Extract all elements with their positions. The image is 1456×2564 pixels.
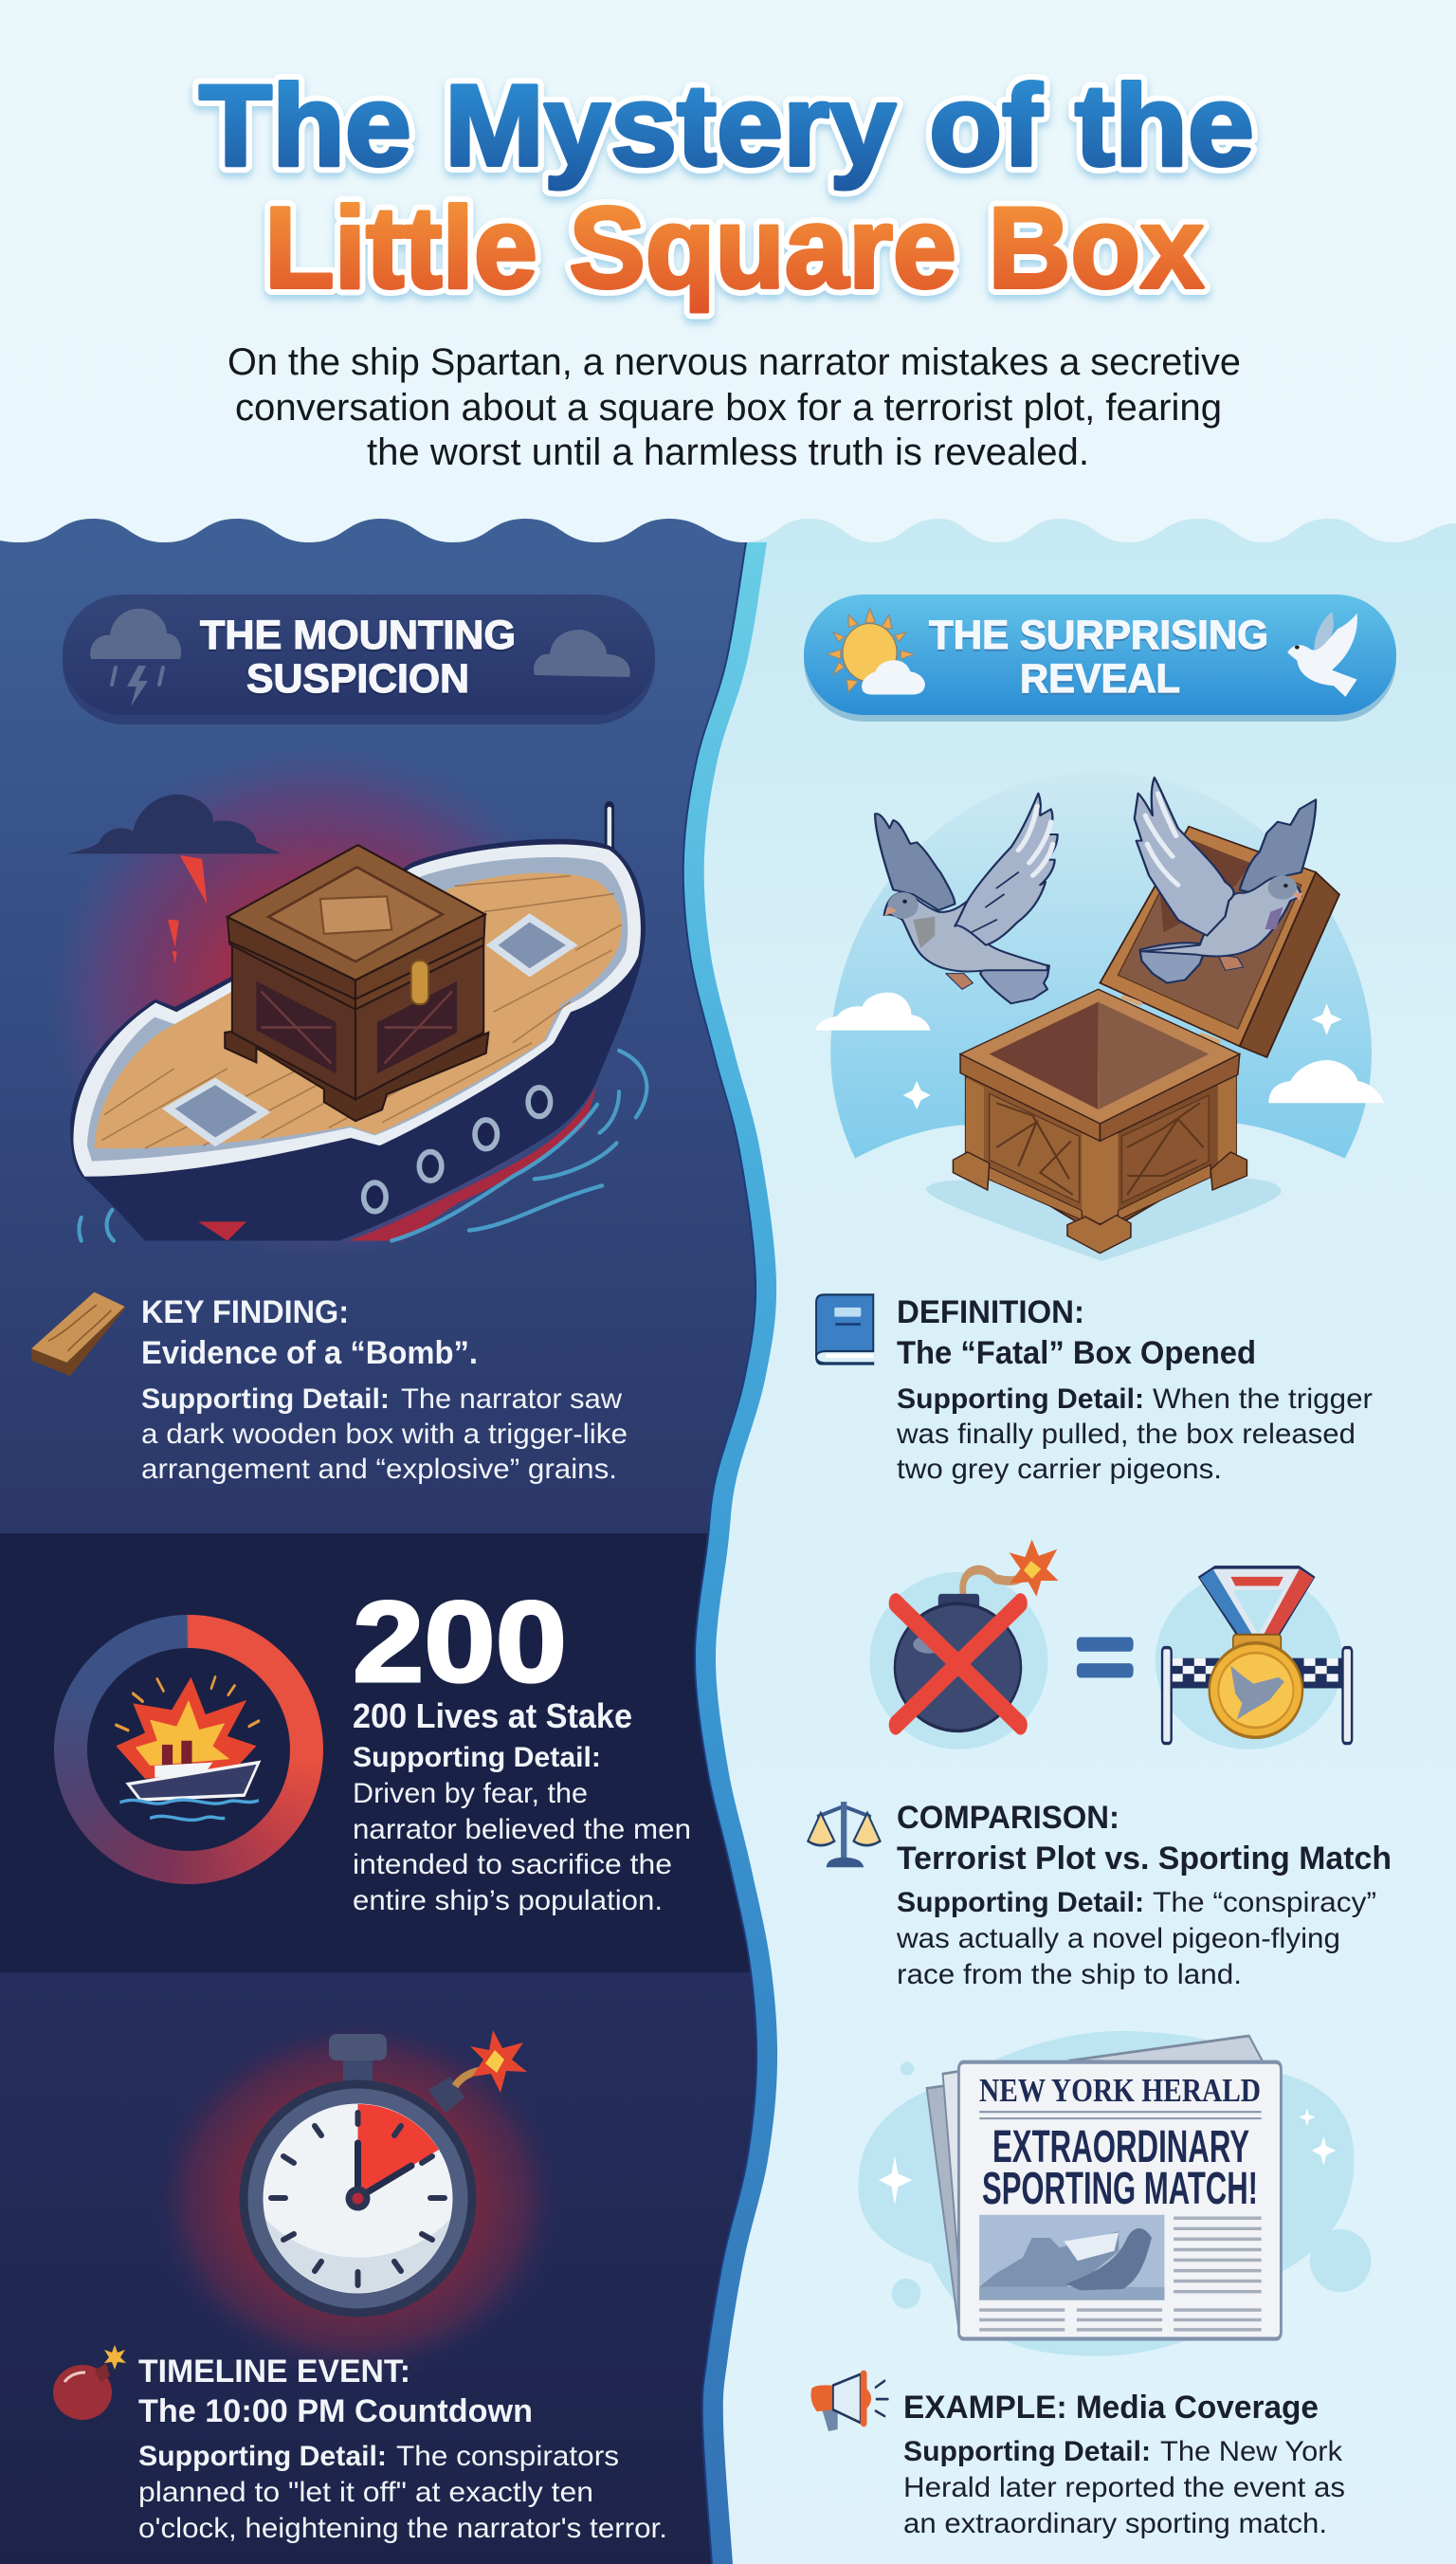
- illustration: ship with wooden box: [48, 744, 646, 1258]
- open lid: [1240, 872, 1339, 1057]
- title: Little Square Box: [264, 183, 1204, 312]
- heading text: REVEAL: [1020, 656, 1180, 702]
- column lines: [979, 2218, 1262, 2330]
- title: [199, 61, 1254, 312]
- back sheets: [927, 2083, 958, 2330]
- pigeon right: [1135, 778, 1316, 983]
- icon: megaphone: [810, 2371, 888, 2431]
- text block: timeline event: [138, 2353, 667, 2544]
- illustration: stopwatch bomb: [147, 2013, 568, 2383]
- stat: 200 lives at stake: Driven by fear, the: [353, 1778, 588, 1809]
- text block: key finding: Evidence of a “Bomb”.: [141, 1335, 478, 1371]
- text block: timeline event: o'clock, heightening the narrator's terror.: [138, 2513, 667, 2544]
- blob backdrop: [858, 2031, 1355, 2356]
- icon: storm cloud: [90, 609, 181, 706]
- storm cloud: [67, 795, 281, 853]
- text block: definition: The “Fatal” Box Opened: [897, 1335, 1256, 1371]
- heading text: THE SURPRISING: [929, 613, 1268, 658]
- text block: definition: [896, 1294, 1373, 1485]
- warning marks: [168, 855, 207, 963]
- icon: scales: [808, 1802, 881, 1867]
- stat: 200 lives at stake: Supporting Detail:: [353, 1742, 601, 1773]
- panel: right light reveal side: [664, 519, 1456, 2564]
- icon: book: [816, 1294, 873, 1364]
- deck planks: [101, 876, 622, 1148]
- title: Little Square Box: [264, 183, 1204, 312]
- chart: donut gauge with exploding ship: [54, 1615, 323, 1884]
- headline: EXTRAORDINARY: [992, 2122, 1249, 2172]
- text block: key finding: a dark wooden box with a trigger-like: [141, 1419, 628, 1450]
- icon: white dove: [1287, 612, 1357, 697]
- text block: key finding: KEY FINDING:: [141, 1294, 349, 1330]
- fuse and spark: [428, 2077, 464, 2113]
- text block: key finding: Supporting Detail:: [141, 1383, 390, 1415]
- mast: [600, 806, 619, 855]
- feet and base rail: [984, 1164, 1210, 1220]
- text block: key finding: The narrator saw: [401, 1383, 622, 1415]
- text block: comparison: Supporting Detail:: [897, 1887, 1144, 1918]
- box rim: [960, 1054, 1100, 1141]
- illustration: newspaper: [858, 2031, 1371, 2356]
- hinges: [1123, 998, 1218, 1041]
- portholes: [364, 1088, 551, 1212]
- text block: comparison: Terrorist Plot vs. Sporting Match: [897, 1841, 1392, 1877]
- text block: comparison: [896, 1800, 1392, 1990]
- pigeon left: [875, 794, 1058, 1003]
- divider: wavy blue band: [0, 542, 777, 2564]
- sky dome: [830, 771, 1372, 1159]
- front page: [958, 2062, 1281, 2339]
- heading text: SUSPICION: [246, 656, 469, 702]
- text block: comparison: race from the ship to land.: [897, 1959, 1242, 1990]
- intro text: [228, 341, 1241, 473]
- text block: timeline event: planned to "let it off" at exactly ten: [138, 2477, 593, 2508]
- icon: sun behind cloud: [828, 609, 925, 695]
- text block: comparison: The “conspiracy”: [1153, 1887, 1376, 1918]
- wooden box: [225, 845, 488, 1121]
- deck and rail: [73, 845, 641, 1177]
- icon: equals sign: [1077, 1638, 1134, 1677]
- heading pill: the mounting suspicion: [63, 595, 655, 724]
- stat: 200 lives at stake: [353, 1577, 691, 1916]
- text block: timeline event: Supporting Detail:: [138, 2441, 387, 2472]
- text block: definition: two grey carrier pigeons.: [897, 1454, 1222, 1485]
- icon: exploding ship: [116, 1677, 259, 1820]
- text block: example: EXAMPLE: Media Coverage: [903, 2390, 1319, 2426]
- stat: 200 lives at stake: entire ship’s population.: [353, 1885, 663, 1916]
- heading text: [200, 613, 516, 702]
- icon: wooden plank: [31, 1292, 126, 1376]
- text block: definition: When the trigger: [1153, 1383, 1373, 1415]
- text block: example: Supporting Detail:: [903, 2436, 1151, 2467]
- text block: example: an extraordinary sporting match.: [903, 2508, 1327, 2539]
- text block: example: Herald later reported the event as: [903, 2472, 1345, 2503]
- deck hatches: [162, 1078, 271, 1146]
- text block: definition: DEFINITION:: [897, 1294, 1084, 1330]
- text block: definition: was finally pulled, the box released: [896, 1419, 1356, 1450]
- text block: example: The New York: [1160, 2436, 1343, 2467]
- text block: comparison: COMPARISON:: [897, 1800, 1119, 1836]
- icon: crossed-out bomb: [869, 1539, 1059, 1749]
- intro text: the worst until a harmless truth is revealed.: [367, 431, 1089, 473]
- box shadow: [926, 1177, 1282, 1261]
- stat: 200 lives at stake: intended to sacrifice the: [353, 1849, 672, 1880]
- intro text: On the ship Spartan, a nervous narrator mistakes a secretive: [228, 341, 1241, 383]
- heading text: [929, 613, 1268, 702]
- text block: definition: Supporting Detail:: [897, 1383, 1144, 1415]
- stat: 200 lives at stake: narrator believed the men: [353, 1814, 691, 1845]
- text block: timeline event: The 10:00 PM Countdown: [138, 2393, 533, 2429]
- panel: left dark suspicion side: [0, 519, 758, 2564]
- water ripples: [79, 1051, 646, 1240]
- text block: key finding: arrangement and “explosive” grains.: [141, 1454, 617, 1485]
- intro text: conversation about a square box for a terrorist plot, fearing: [235, 387, 1222, 429]
- crown: [343, 2060, 373, 2088]
- icon: medal and finish line: [1156, 1566, 1352, 1749]
- sparkles: [903, 1003, 1342, 1109]
- icon: cloud: [534, 630, 630, 677]
- text block: key finding: [141, 1294, 628, 1485]
- open box body: [966, 1073, 1100, 1236]
- masthead: NEW YORK HERALD: [979, 2072, 1261, 2109]
- icon: small red bomb: [53, 2345, 126, 2420]
- stat: 200 lives at stake: 200: [353, 1577, 567, 1706]
- clouds: [815, 993, 931, 1031]
- photo: [979, 2215, 1164, 2300]
- heading text: THE MOUNTING: [200, 613, 516, 658]
- illustration: newspaper: SPORTING MATCH!: [982, 2164, 1258, 2214]
- title: The Mystery of the: [199, 61, 1254, 190]
- text block: example: [903, 2390, 1345, 2539]
- illustration: open box with pigeons: [815, 771, 1384, 1261]
- text block: comparison: was actually a novel pigeon-flying: [896, 1923, 1340, 1954]
- dial: [239, 2080, 476, 2317]
- text block: timeline event: TIMELINE EVENT:: [138, 2353, 410, 2390]
- stat: 200 lives at stake: 200 Lives at Stake: [353, 1696, 632, 1735]
- ship hull: [70, 839, 646, 1240]
- title: The Mystery of the: [199, 61, 1254, 190]
- heading pill: the surprising reveal: [804, 595, 1396, 722]
- text block: timeline event: The conspirators: [396, 2441, 619, 2472]
